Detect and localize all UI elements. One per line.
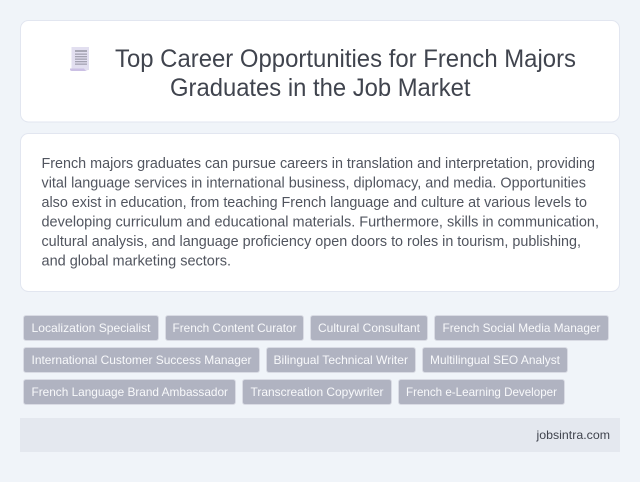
- description text: French majors graduates can pursue careers in translation and interpretation, providing: [42, 156, 595, 172]
- tag: International Customer Success Manager: International Customer Success Manager: [32, 353, 252, 367]
- footer site name: jobsintra.com: [535, 428, 610, 442]
- title: [115, 45, 576, 102]
- description text: also exist in education, from teaching French language and culture at various levels to: [42, 195, 587, 211]
- tag: Bilingual Technical Writer: Bilingual Technical Writer: [274, 353, 408, 367]
- description text: [42, 156, 599, 269]
- panel: title card: [20, 20, 620, 122]
- tag: Transcreation Copywriter: Transcreation Copywriter: [250, 385, 384, 399]
- description text: developing curriculum and educational materials. Furthermore, skills in communication,: [42, 214, 599, 230]
- tag: Localization Specialist: Localization Specialist: [32, 321, 151, 335]
- tag: Multilingual SEO Analyst: Multilingual SEO Analyst: [430, 353, 561, 367]
- tag: French e-Learning Developer: [398, 380, 564, 404]
- tag: International Customer Success Manager: [24, 348, 260, 372]
- title: Graduates in the Job Market: [170, 74, 471, 102]
- tag: Multilingual SEO Analyst: [422, 348, 568, 372]
- panel: description card: [20, 134, 620, 292]
- tag: French Language Brand Ambassador: [24, 380, 236, 404]
- tag: Bilingual Technical Writer: [266, 348, 416, 372]
- tag: Cultural Consultant: Cultural Consultant: [318, 321, 421, 335]
- tag: French Language Brand Ambassador: French Language Brand Ambassador: [32, 385, 228, 399]
- footer bar: [20, 418, 620, 452]
- tag: French Social Media Manager: French Social Media Manager: [442, 321, 601, 335]
- description text: vital language services in international business, diplomacy, and media. Opportunities: [42, 175, 586, 191]
- tag: French Content Curator: French Content Curator: [172, 321, 296, 335]
- tag list: [24, 316, 608, 404]
- tag: Localization Specialist: [24, 316, 158, 340]
- tag: French e-Learning Developer: French e-Learning Developer: [406, 385, 557, 399]
- title: Top Career Opportunities for French Majors: [115, 45, 576, 73]
- description text: cultural analysis, and language proficiency open doors to roles in tourism, publishing,: [42, 234, 581, 250]
- tag: Transcreation Copywriter: [242, 380, 392, 404]
- tag: French Content Curator: [166, 316, 304, 340]
- tag: Cultural Consultant: [310, 316, 428, 340]
- description text: and global marketing sectors.: [42, 253, 231, 269]
- icon: paper scroll: [70, 47, 89, 71]
- tag: French Social Media Manager: [434, 316, 608, 340]
